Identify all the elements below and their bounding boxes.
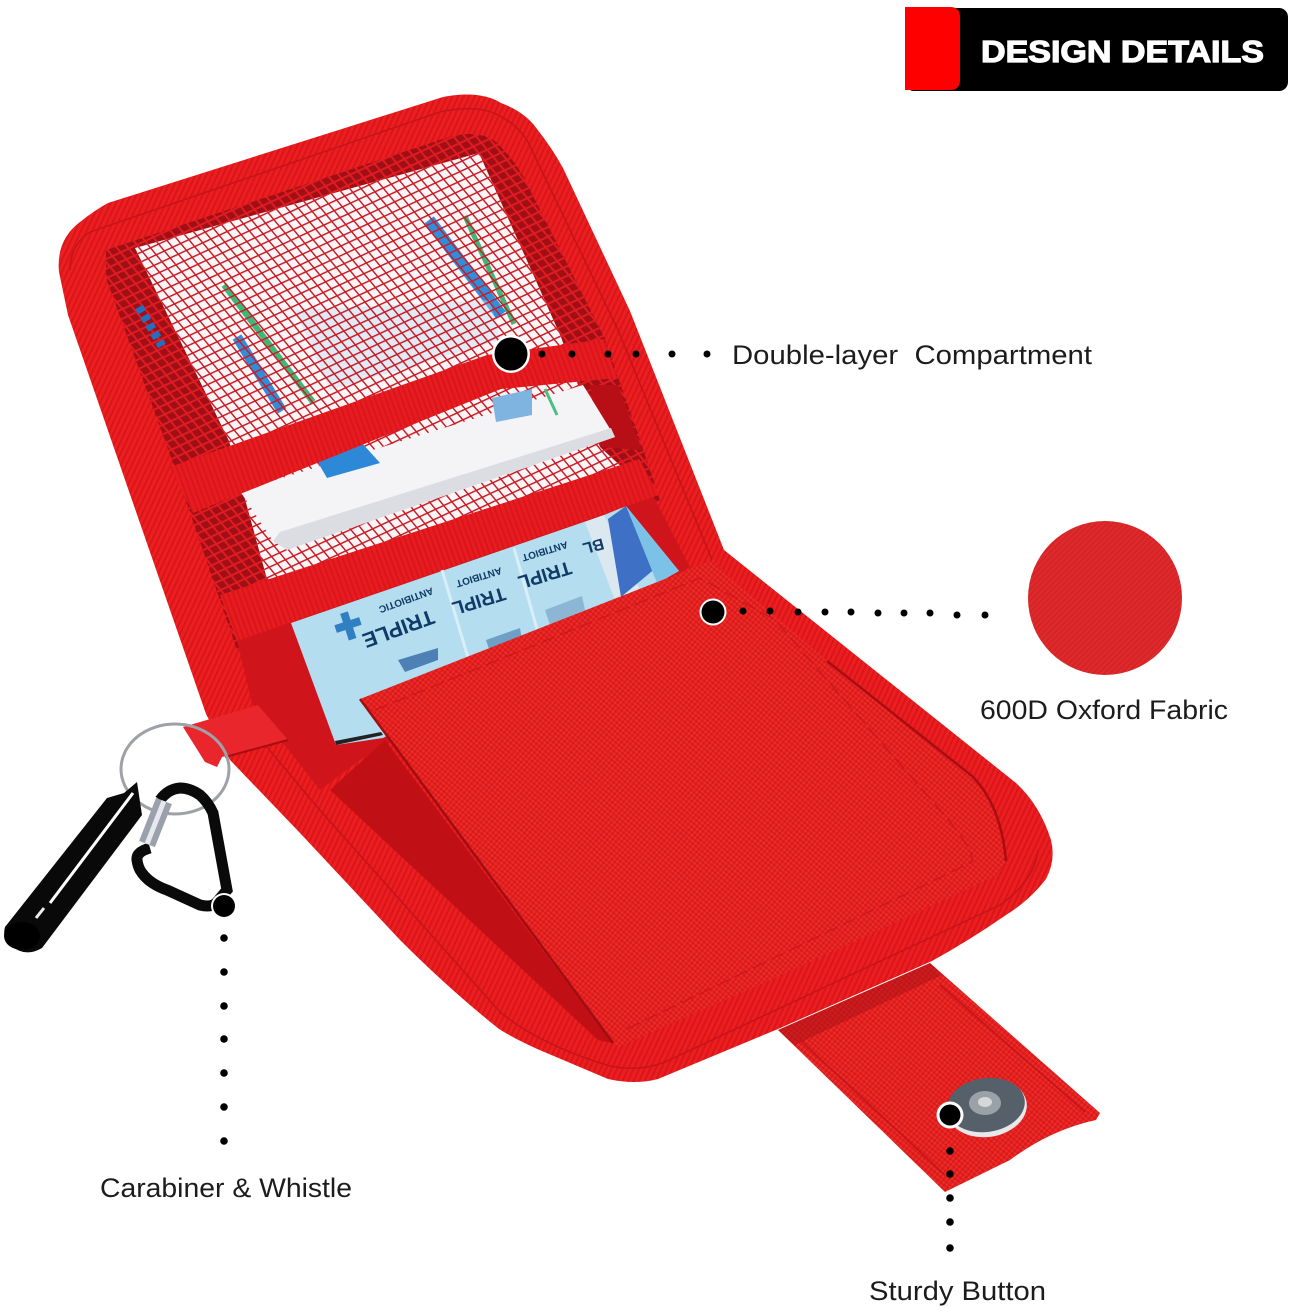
callout: sturdy button (869, 1102, 1046, 1306)
snap button (943, 1073, 1031, 1142)
antibiotic packets: ANTIBIOT (521, 538, 569, 563)
antibiotic packets (291, 506, 679, 745)
mesh compartment (106, 134, 660, 650)
white packet (240, 385, 615, 550)
front flap pocket (360, 560, 1006, 1047)
antibiotic packets: ANTIBIOT (455, 564, 503, 589)
antibiotic packets: ANTIBIOTIC (377, 584, 435, 614)
callout: sturdy button: Sturdy Button (869, 1276, 1046, 1306)
callout: 600D oxford fabric: 600D Oxford Fabric (980, 695, 1228, 725)
whistle, ring and carabiner (4, 724, 229, 952)
callout: 600D oxford fabric (700, 521, 1228, 725)
header badge: design details (905, 7, 1288, 91)
inner fold shadow (330, 740, 612, 1043)
antibiotic packets: TRIPL (449, 582, 508, 618)
split key ring (121, 724, 229, 814)
strap with snap button (778, 963, 1100, 1192)
lower compartment (237, 490, 690, 790)
first aid pouch photo (59, 95, 1100, 1192)
elastic band: lower (220, 459, 659, 641)
header badge: design details: DESIGN DETAILS (981, 34, 1264, 69)
elastic band: upper (170, 339, 617, 513)
antibiotic packets: BL (580, 534, 606, 556)
carabiner (137, 788, 227, 906)
pouch body outline (59, 95, 1053, 1082)
antibiotic packets: TRIPL (515, 556, 574, 592)
callout: double-layer compartment (492, 335, 1093, 373)
antibiotic packets: TRIPLE (359, 605, 437, 652)
medical pouch behind mesh (135, 153, 625, 590)
whistle (4, 782, 142, 952)
callout: carabiner and whistle: Carabiner & Whistle (100, 1173, 352, 1203)
fabric swatch (1028, 521, 1182, 675)
callout: carabiner and whistle (100, 893, 352, 1203)
key ring loop tab (183, 705, 288, 767)
callout: double-layer compartment: Double-layer Compartment (732, 340, 1093, 370)
